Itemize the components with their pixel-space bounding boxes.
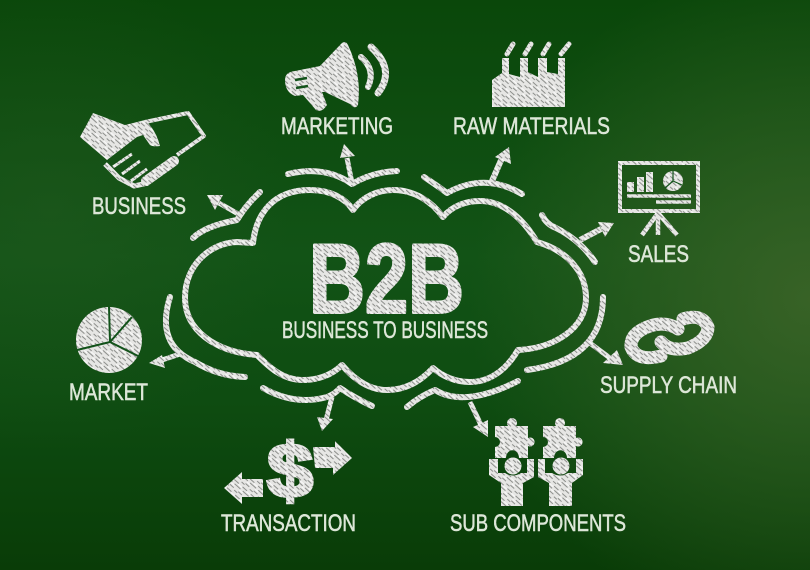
icon: chain links xyxy=(631,317,708,358)
icon: factory xyxy=(492,44,569,107)
icon: dollar with arrows xyxy=(224,429,352,514)
icon: presentation board xyxy=(620,163,698,235)
label: marketing: MARKETING xyxy=(281,113,393,140)
icon: puzzle pieces and people xyxy=(489,418,583,506)
label: sub components: SUB COMPONENTS xyxy=(450,510,626,537)
sales group xyxy=(542,163,698,268)
central cloud outline xyxy=(185,190,586,390)
marketing group xyxy=(281,42,397,184)
transaction group xyxy=(221,388,372,537)
B2B heading: B2B xyxy=(309,224,464,334)
arrow: business xyxy=(193,192,260,238)
label: transaction: TRANSACTION xyxy=(221,510,356,537)
label: business: BUSINESS xyxy=(92,193,186,220)
arrow: transaction xyxy=(263,388,372,431)
arrow: market xyxy=(149,297,245,377)
market group xyxy=(69,297,245,406)
label: sales: SALES xyxy=(628,241,689,268)
arrow: sub components xyxy=(407,381,518,437)
label: market: MARKET xyxy=(69,379,148,406)
sub components group xyxy=(407,381,626,537)
arrow: raw materials xyxy=(424,147,522,194)
icon: megaphone xyxy=(285,42,386,111)
label: raw materials: RAW MATERIALS xyxy=(453,113,610,140)
arrow: supply chain xyxy=(527,297,623,370)
icon: dollar with arrows: $ xyxy=(267,429,313,514)
subtitle: business to business: BUSINESS TO BUSINESS xyxy=(282,317,488,344)
arrow: sales xyxy=(542,215,614,262)
icon: pie chart xyxy=(76,307,142,373)
raw materials group xyxy=(424,44,610,194)
supply chain group xyxy=(527,297,737,399)
label: supply chain: SUPPLY CHAIN xyxy=(600,372,737,399)
arrow: marketing xyxy=(288,144,397,184)
business group xyxy=(80,113,260,238)
icon: handshake xyxy=(80,113,204,186)
